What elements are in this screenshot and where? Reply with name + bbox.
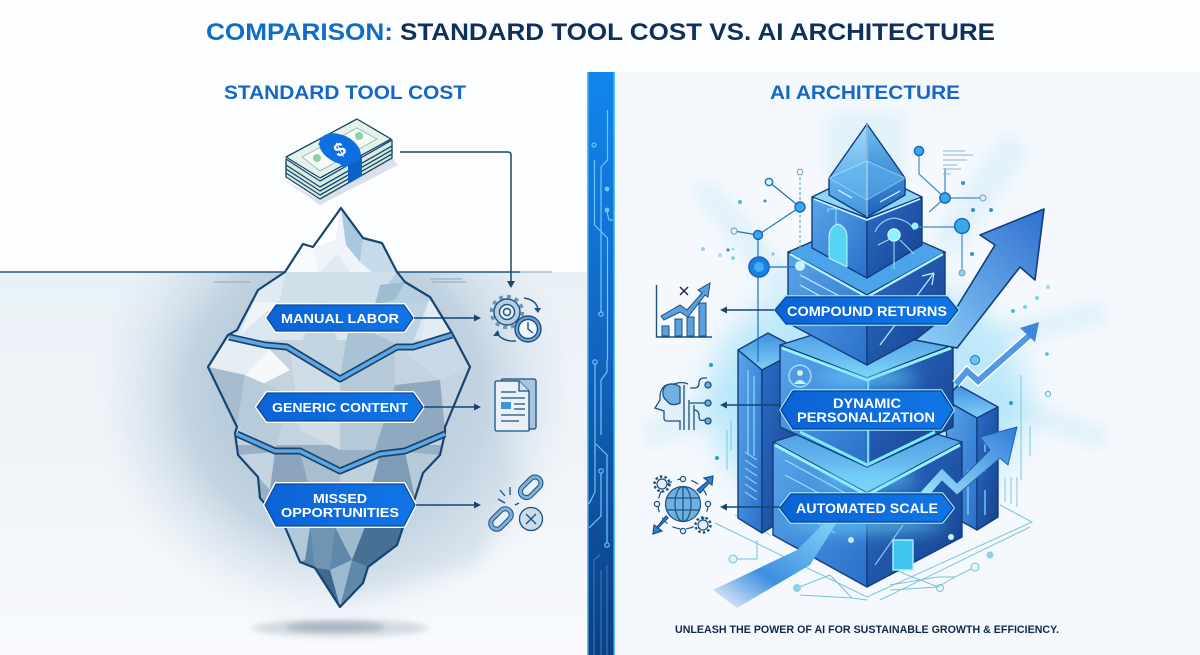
arrow: missed opportunities [416,502,481,508]
panel: standard tool cost [0,119,587,655]
light rays [640,112,1110,450]
seabed shadow [252,619,428,637]
panel background [615,72,1200,655]
tagline: UNLEASH THE POWER OF AI FOR SUSTAINABLE GROWTH & EFFICIENCY. [675,624,1059,636]
tower [738,124,998,587]
title: STANDARD TOOL COST VS. AI ARCHITECTURE [400,19,995,46]
data text lines [943,151,973,174]
arrow: generic content [424,404,481,410]
tower tier four [780,318,953,467]
label: dynamic personalization: PERSONALIZATION [797,409,935,425]
network nodes [731,146,986,362]
tower tier two [812,170,922,278]
arrow: main growth [915,209,1044,348]
center divider [587,72,615,655]
water [0,271,587,620]
iceberg [200,200,480,615]
label: automated scale [780,494,953,522]
icon: ai head [655,378,711,430]
tower side right [945,385,998,530]
panel: ai architecture [615,72,1200,655]
heading: ai architecture: AI ARCHITECTURE [770,82,960,104]
icon: growth chart [656,283,712,337]
arrow: compound returns [720,306,774,314]
arrow: lower growth [713,522,837,608]
label: dynamic personalization [781,391,953,429]
particles [701,181,1051,507]
label: manual labor [267,305,413,331]
title: COMPARISON: [206,19,393,46]
circuit floor [715,505,1032,600]
tower side left [738,333,800,533]
arrow: manual labor [414,314,481,322]
label: dynamic personalization: DYNAMIC [833,395,901,411]
label: generic content [257,393,423,421]
label: compound returns [775,297,958,324]
label: manual labor: MANUAL LABOR [281,311,400,326]
label: missed opportunities: MISSED [313,491,367,506]
tower pyramid [829,124,905,217]
tower tier three [788,218,945,365]
icon: globe with gears [653,476,713,534]
tower tier five [773,412,962,587]
icon: broken chain [488,475,543,532]
icon: gears and clock [492,296,541,342]
arrow: dynamic personalization [720,402,780,408]
arrow: cash to process icon [400,152,515,288]
title [206,19,995,46]
iceberg band lower [237,434,445,471]
icon: stack of cash: $ [331,138,350,162]
icon: document [495,379,536,431]
arrow: automated scale [720,504,780,510]
tower glow [707,275,1027,525]
label: missed opportunities [265,484,415,526]
heading: standard tool cost: STANDARD TOOL COST [224,82,466,104]
label: automated scale: AUTOMATED SCALE [796,500,938,516]
icon: stack of cash [281,119,398,205]
label: generic content: GENERIC CONTENT [272,400,408,415]
label: missed opportunities: OPPORTUNITIES [281,505,399,520]
arrow: upper zigzag [920,427,1017,495]
arrow: secondary growth [956,322,1039,384]
label: compound returns: COMPOUND RETURNS [787,303,947,319]
glow between tiers [787,370,947,532]
iceberg band upper [229,335,452,379]
